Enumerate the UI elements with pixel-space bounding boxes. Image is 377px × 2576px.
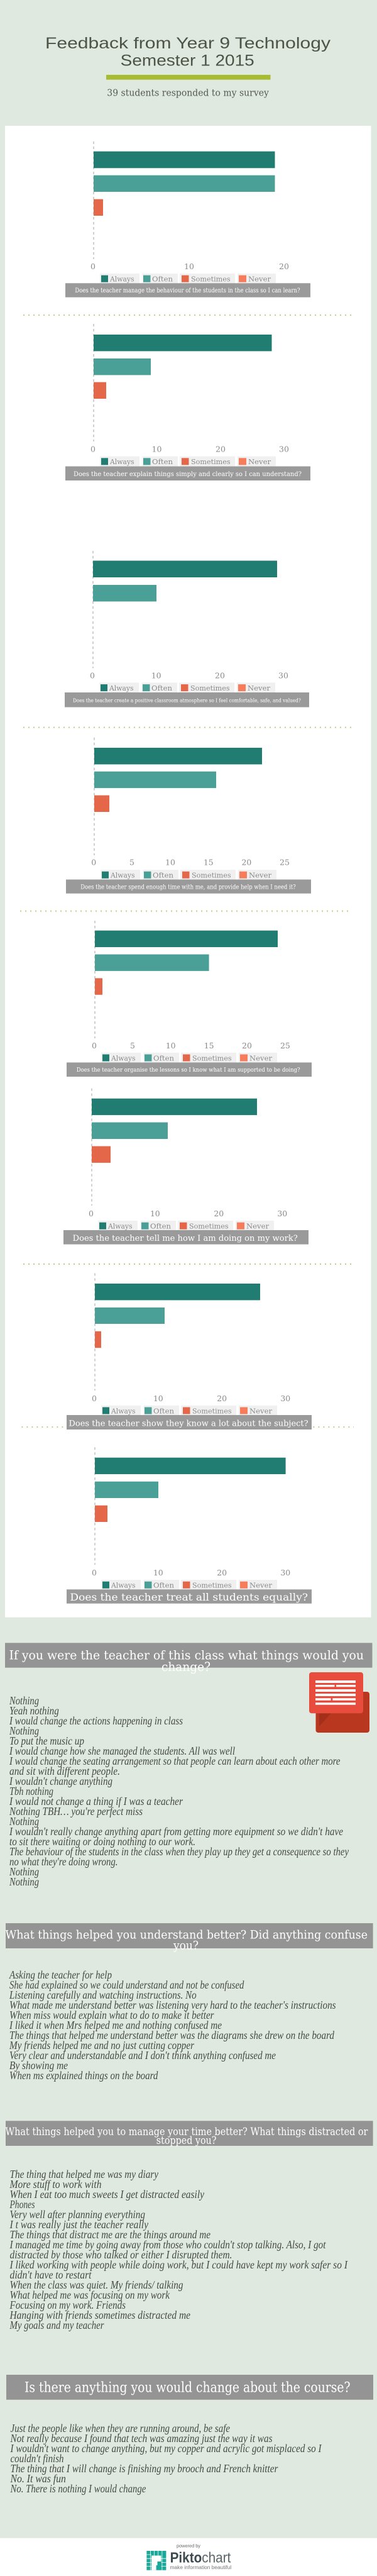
caption <box>65 283 310 297</box>
section heading: managing time: stopped you? <box>156 2135 216 2147</box>
legend <box>99 682 275 692</box>
chart 6: feedback on work: 30 <box>277 1209 287 1218</box>
text block: teacher answers: Nothing <box>9 1875 39 1888</box>
legend: Sometimes <box>192 1407 232 1415</box>
legend <box>101 1053 277 1063</box>
legend: Never <box>249 872 272 879</box>
caption <box>65 467 310 480</box>
legend: Never <box>248 684 271 692</box>
chart 8: equal treatment: 30 <box>280 1568 290 1577</box>
chart 1: behaviour: 10 <box>184 262 194 271</box>
text block: course answers: The thing that I will change is finishing my brooch and French knitter <box>10 2462 278 2475</box>
legend: Always <box>107 1223 133 1230</box>
text block: teacher answers: Yeah nothing <box>9 1704 59 1717</box>
chart 7: subject knowledge: 0 <box>92 1394 97 1403</box>
text block: time answers: I t was really just the teacher really <box>9 2218 148 2231</box>
text block: teacher answers: to sit there waiting or doing nothing to our work. <box>9 1835 195 1848</box>
chart 4: time and help: 5 <box>129 858 134 867</box>
caption: Does the teacher create a positive classroom atmosphere so I feel comfortable, safe, and valued? <box>73 697 301 703</box>
legend: Often <box>153 872 173 879</box>
chart 4: time and help: 0 <box>91 858 96 867</box>
caption: Does the teacher manage the behaviour of the students in the class so I can learn? <box>75 287 300 294</box>
text block: understanding answers: When ms explained things on the board <box>9 2069 158 2082</box>
footer <box>0 2538 377 2576</box>
text block: time answers: I managed me time by going away from those who couldn't stop talking. Also, I got <box>9 2238 326 2251</box>
text block: time answers <box>9 2168 348 2331</box>
chart 8: equal treatment: 10 <box>153 1568 163 1577</box>
text block: time answers: More stuff to work with <box>9 2178 102 2190</box>
footer: powered by <box>177 2545 201 2548</box>
title underline <box>106 75 270 80</box>
text block: course answers: Not really because I found that tech was amazing just the way it was <box>10 2432 273 2445</box>
chart 2: explaining: 30 <box>279 444 289 454</box>
legend: Often <box>153 1054 174 1062</box>
legend: Sometimes <box>189 1223 229 1230</box>
text block: understanding answers: My friends helped me and no just cutting copper <box>9 2039 195 2051</box>
text block: time answers: My goals and my teacher <box>9 2319 104 2331</box>
caption <box>67 1415 312 1430</box>
legend: Never <box>249 1407 273 1415</box>
chart 7: subject knowledge <box>67 1273 312 1430</box>
chart 3: atmosphere: 20 <box>215 670 225 680</box>
text block: time answers: Phones <box>9 2198 35 2211</box>
legend <box>100 274 276 284</box>
caption: Does the teacher spend enough time with me, and provide help when I need it? <box>80 884 296 891</box>
chart 2: explaining: 10 <box>152 444 161 454</box>
chart 3: atmosphere <box>65 551 309 707</box>
text block: teacher answers: To put the music up <box>9 1735 84 1747</box>
text block: time answers: What helped me was focusing on my work <box>10 2289 170 2301</box>
text block: time answers: The things that distract me are the things around me <box>10 2228 210 2241</box>
text block: time answers: When I eat too much sweets I get distracted easily <box>10 2188 204 2201</box>
chart 2: explaining: 20 <box>216 444 226 454</box>
text block: understanding answers: Asking the teacher for help <box>9 1968 112 1981</box>
legend: Sometimes <box>191 458 231 466</box>
legend: Never <box>249 1054 273 1062</box>
legend: Always <box>110 872 135 879</box>
text block: time answers: Very well after planning everything <box>10 2208 145 2221</box>
chart 1: behaviour: 20 <box>279 262 289 271</box>
chart 5: organising lessons: 5 <box>130 1041 135 1050</box>
chart 7: subject knowledge: 30 <box>280 1394 290 1403</box>
icon: Piktochart logo <box>146 2551 166 2570</box>
text block: teacher answers: I wouldn't change anything <box>9 1775 112 1787</box>
section heading: teacher of this class: change? <box>161 1659 210 1674</box>
legend: Never <box>249 1581 273 1590</box>
text block: course answers: No. It was fun <box>10 2472 66 2485</box>
chart 6: feedback on work: 20 <box>214 1209 224 1218</box>
chart 1: behaviour <box>65 142 310 297</box>
legend <box>98 1221 274 1230</box>
legend: Often <box>152 458 173 466</box>
text block: teacher answers: Nothing <box>9 1865 39 1878</box>
section heading: understand better: you? <box>173 1938 199 1952</box>
text block: understanding answers: She had explained so we could understand and not be confused <box>9 1979 244 1991</box>
legend: Never <box>246 1223 270 1230</box>
title: Semester 1 2015 <box>121 52 254 70</box>
chart 5: organising lessons <box>67 921 312 1077</box>
text block: teacher answers: Nothing <box>9 1694 39 1707</box>
chart 1: behaviour: 0 <box>90 262 96 271</box>
text block: teacher answers: Nothing <box>9 1724 39 1737</box>
text block: teacher answers <box>9 1694 349 1888</box>
chart 4: time and help <box>66 738 311 894</box>
caption: Does the teacher treat all students equally? <box>70 1591 308 1603</box>
chart 6: feedback on work: 0 <box>89 1209 94 1218</box>
legend: Often <box>150 1223 171 1230</box>
chart 5: organising lessons: 20 <box>242 1041 252 1050</box>
caption: Does the teacher tell me how I am doing on my work? <box>73 1234 298 1243</box>
legend: Sometimes <box>192 872 231 879</box>
title: Feedback from Year 9 Technology <box>45 35 331 52</box>
text block: time answers: Hanging with friends sometimes distracted me <box>9 2309 190 2321</box>
text block: time answers: Focusing on my work. Friends <box>9 2299 126 2311</box>
legend: Always <box>109 684 134 692</box>
text block: time answers: didn't have to restart <box>10 2268 92 2281</box>
caption <box>65 692 309 707</box>
caption <box>67 1062 312 1077</box>
text block: teacher answers: I would not change a thing if I was a teacher <box>9 1795 183 1807</box>
icon: speech bubbles <box>309 1672 369 1733</box>
legend: Sometimes <box>192 1581 232 1590</box>
text block: teacher answers: Tbh nothing <box>9 1785 53 1797</box>
chart 3: atmosphere: 0 <box>90 670 95 680</box>
legend <box>101 1580 277 1590</box>
legend: Often <box>153 1581 174 1590</box>
text block: understanding answers: Very clear and understandable and I don't think anything confused me <box>9 2049 276 2062</box>
legend: Always <box>109 275 134 283</box>
legend: Always <box>111 1407 136 1415</box>
text block: teacher answers: Nothing TBH… you're perfect miss <box>9 1805 143 1818</box>
legend <box>100 457 276 466</box>
chart 8: equal treatment: 0 <box>92 1568 97 1577</box>
text block: course answers: couldn't finish <box>10 2452 64 2465</box>
legend <box>101 1406 277 1415</box>
text block: course answers <box>10 2422 322 2495</box>
text block: understanding answers <box>9 1968 336 2082</box>
text block: time answers: The thing that helped me was my diary <box>10 2168 158 2180</box>
text block: course answers: No. There is nothing I would change <box>10 2482 146 2495</box>
legend <box>101 870 276 880</box>
caption <box>66 879 311 894</box>
text block: time answers: distracted by those who talked or either I disrupted them. <box>10 2248 232 2261</box>
text block: teacher answers: I would change the actions happening in class <box>9 1714 183 1727</box>
chart 8: equal treatment <box>67 1447 312 1604</box>
caption: Does the teacher organise the lessons so I know what I am supported to be doing? <box>77 1067 300 1074</box>
chart 2: explaining: 0 <box>90 444 96 454</box>
chart 5: organising lessons: 10 <box>166 1041 176 1050</box>
footer: make information beautiful <box>170 2565 231 2570</box>
caption <box>63 1230 309 1245</box>
chart 4: time and help: 10 <box>165 858 175 867</box>
title <box>45 35 331 70</box>
chart 4: time and help: 20 <box>241 858 251 867</box>
panel: survey charts <box>5 126 371 1618</box>
chart 8: equal treatment: 20 <box>217 1568 227 1577</box>
text block: understanding answers: Listening carefully and watching instructions. No <box>9 1989 197 2001</box>
text block: teacher answers: Nothing <box>9 1815 39 1828</box>
section heading: managing time <box>5 2121 373 2147</box>
text block: teacher answers: no what they're doing wrong. <box>9 1855 118 1868</box>
chart 5: organising lessons: 25 <box>280 1041 290 1050</box>
text block: understanding answers: By showing me <box>9 2059 68 2072</box>
section heading: teacher of this class <box>5 1643 372 1674</box>
chart 6: feedback on work: 10 <box>150 1209 160 1218</box>
text block: teacher answers: I would change how she managed the students. All was well <box>9 1745 235 1757</box>
legend: Sometimes <box>191 275 231 283</box>
chart 7: subject knowledge: 10 <box>153 1394 163 1403</box>
legend: Sometimes <box>192 1054 232 1062</box>
legend: Often <box>153 1407 174 1415</box>
legend: Always <box>111 1581 136 1590</box>
subtitle: 39 students responded to my survey <box>107 87 269 98</box>
chart 5: organising lessons: 15 <box>204 1041 214 1050</box>
text block: teacher answers: and sit with different people. <box>9 1765 120 1777</box>
legend: Often <box>152 275 173 283</box>
chart 3: atmosphere: 10 <box>151 670 161 680</box>
legend: Always <box>111 1054 136 1062</box>
chart 4: time and help: 15 <box>204 858 214 867</box>
chart 5: organising lessons: 0 <box>92 1041 97 1050</box>
text block: course answers: I wouldn't want to change anything, but my copper and acrylic got misplaced so I <box>10 2442 322 2455</box>
chart 7: subject knowledge: 20 <box>217 1394 227 1403</box>
caption: Does the teacher show they know a lot about the subject? <box>69 1419 309 1429</box>
text block: understanding answers: When miss would explain what to do to make it better <box>9 2009 214 2021</box>
section heading: teacher of this class: If you were the teacher of this class what things would you <box>9 1648 364 1663</box>
section heading: understand better <box>5 1923 373 1952</box>
text block: time answers: When the class was quiet. My friends/ talking <box>10 2279 183 2291</box>
text block: course answers: Just the people like when they are running around, be safe <box>10 2422 230 2434</box>
legend: Often <box>151 684 172 692</box>
chart 3: atmosphere: 30 <box>278 670 288 680</box>
legend: Never <box>248 458 271 466</box>
chart 6: feedback on work <box>63 1089 309 1245</box>
legend: Always <box>109 458 134 466</box>
footer: Piktochart <box>170 2550 231 2566</box>
chart 2: explaining <box>65 324 310 480</box>
section heading: change about the course <box>6 2375 373 2400</box>
text block: understanding answers: I liked it when Mrs helped me and nothing confused me <box>9 2019 222 2031</box>
legend: Sometimes <box>190 684 230 692</box>
chart 4: time and help: 25 <box>280 858 290 867</box>
caption: Does the teacher explain things simply and clearly so I can understand? <box>74 470 302 478</box>
legend: Never <box>248 275 271 283</box>
